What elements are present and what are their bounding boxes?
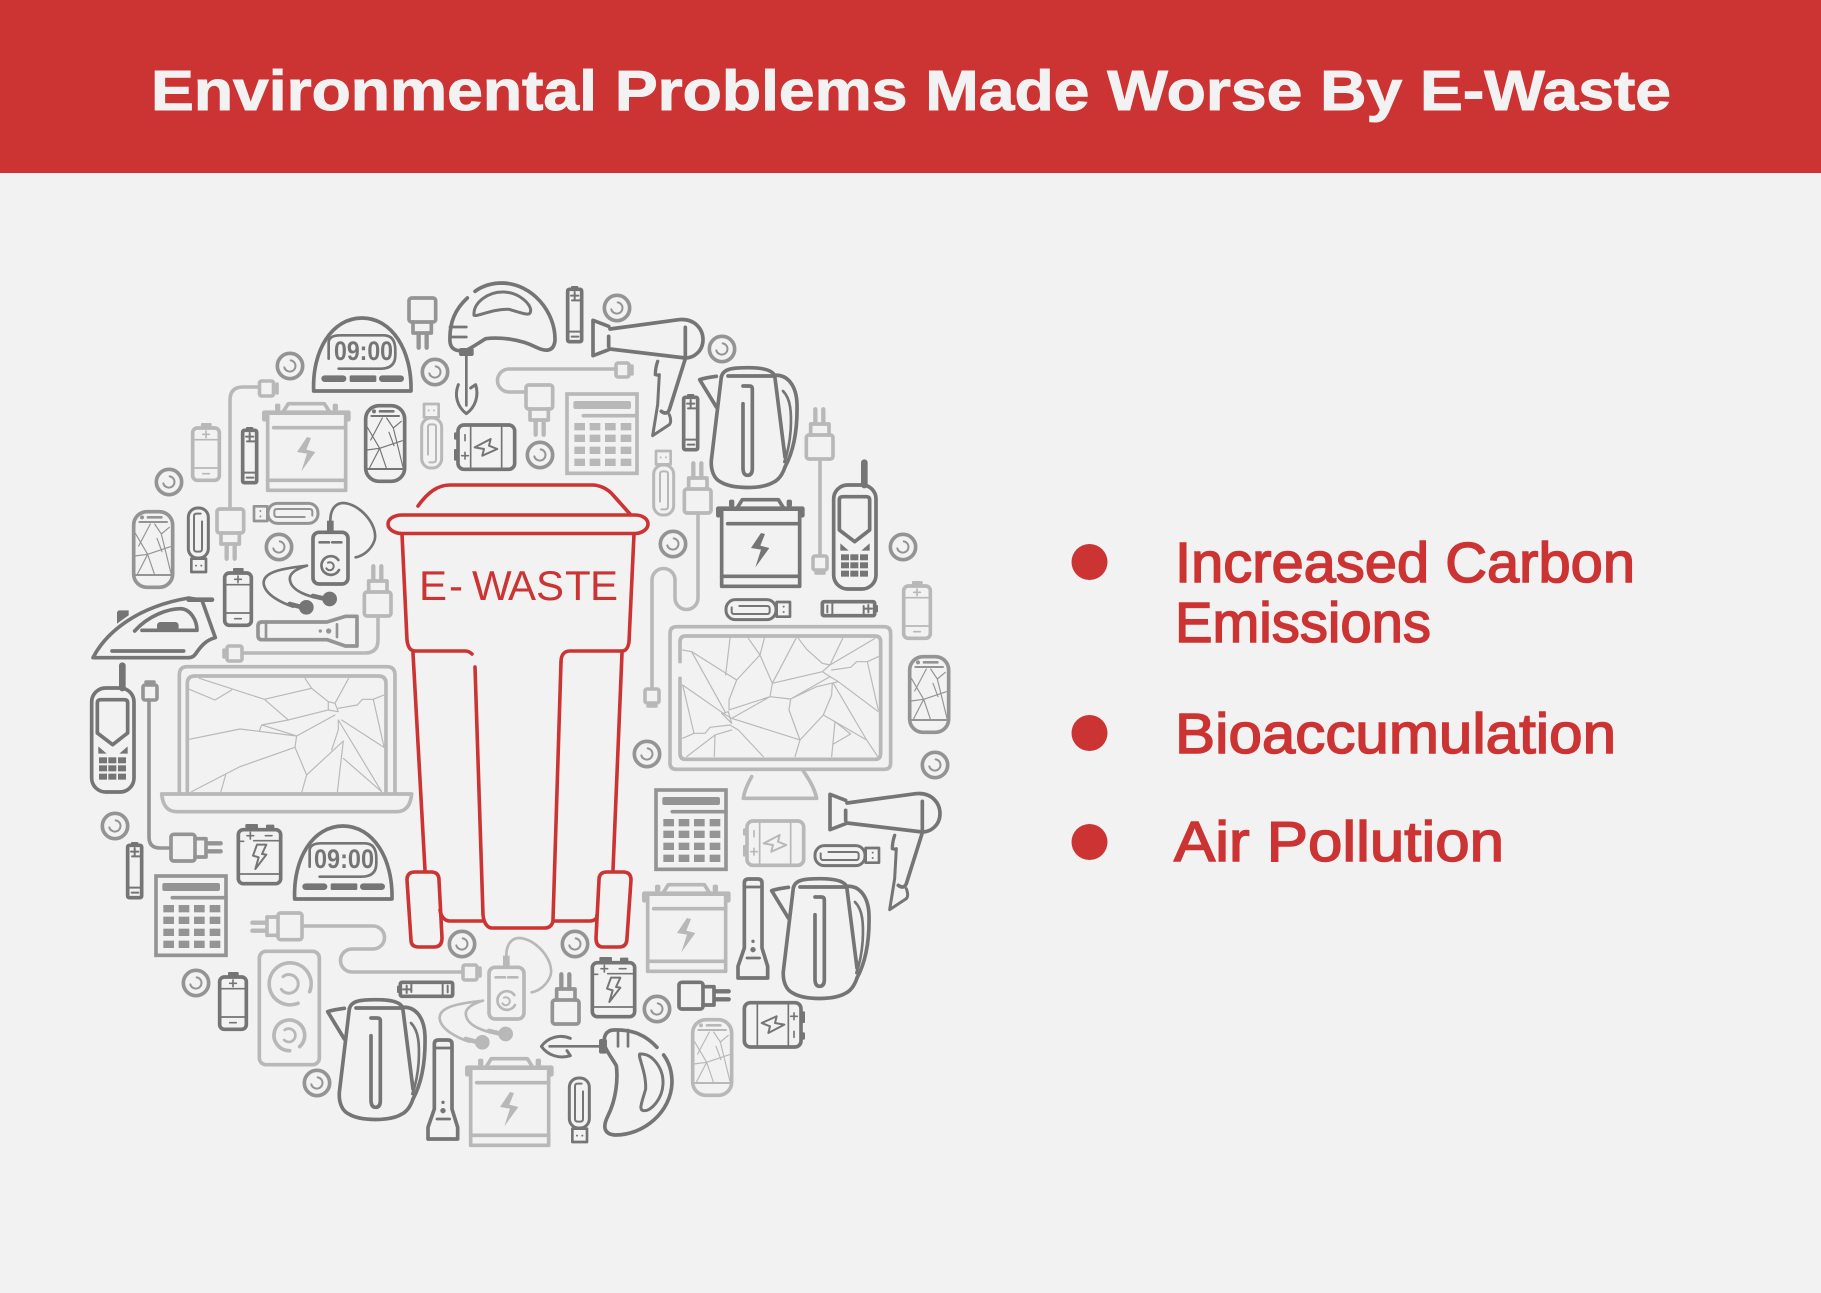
icon: clock: 09:00 [314,844,374,874]
icon: usb stick [654,451,674,515]
icon: usb stick [815,846,879,866]
icon: charger [252,913,302,940]
icon: disc [449,931,475,957]
icon: disc [922,752,948,778]
icon: usb stick [188,508,208,572]
icon: narrow battery horizontal [822,602,878,616]
icon: charger [552,974,579,1024]
icon: power cell [744,1003,805,1047]
icon: cracked monitor [670,627,891,798]
icon: disc [660,531,686,557]
icon: kettle [700,368,797,487]
bullet 1 text line 1: Increased Carbon [1175,531,1635,595]
icon: disc [709,336,735,362]
icon: hand mixer rotated [541,1030,672,1135]
cable: bottom charger [303,926,480,980]
bullet 3 dot [1072,824,1108,860]
bullet 1 text line 2: Emissions [1175,591,1431,655]
icon: narrow battery [568,286,582,342]
cable: charger to connector, mid left [224,617,378,661]
icon: wide battery [225,568,251,625]
icon: car battery [644,885,728,971]
icon: car battery [467,1059,551,1145]
icon: charger [684,463,711,513]
icon: cracked phone [134,512,173,587]
icon: iron [93,598,215,658]
bullet 2 dot [1072,715,1108,751]
icon: wide battery [904,581,930,638]
icon: charger [171,834,221,861]
icon: flashlight [738,879,768,978]
icon: narrow battery [243,427,257,483]
icon: disc [527,442,553,468]
cable: charger to connector, right [813,460,827,573]
icon: hair dryer [593,320,703,436]
icon: cordless phone [834,463,876,589]
icon: speaker [259,951,319,1065]
icon: calculator [567,394,637,473]
icon: calculator [156,876,226,955]
cable: charger with loop, top [498,363,632,392]
icon: charger [409,298,436,348]
bin rim [388,515,648,534]
icon: usb stick [254,503,318,523]
bin right wheel [596,872,631,947]
cable: charger to connector, upper left [230,381,277,508]
icon: flashlight [428,1040,458,1139]
icon: cracked laptop [162,667,412,812]
icon: disc [890,534,916,560]
icon: narrow battery [684,394,698,450]
icon: disc [634,741,660,767]
icon: kettle [772,879,869,998]
icon: clock: 09:00 [334,336,393,366]
icon: square battery [592,957,635,1017]
icon: calculator [656,790,726,869]
icon: usb stick [569,1078,589,1142]
icon: disc [102,813,128,839]
icon: kettle [328,1000,425,1119]
bullet list [1072,531,1635,874]
icon: disc [304,1070,330,1096]
icon: car battery [264,404,348,490]
bullet 1 dot [1072,544,1108,580]
icon: clock [295,826,392,899]
icon: charger [679,982,729,1009]
icon: cracked phone [910,657,949,732]
bin left wheel [407,872,442,947]
icon: car battery [718,500,802,586]
icon: power cell [454,425,515,469]
icon: square battery [238,824,281,884]
cable: S-shaped, right of bin [645,513,698,706]
icon: disc [266,534,292,560]
icon: charger [806,409,833,459]
icon: disc [183,970,209,996]
icon: music player with earphones [264,503,375,615]
bin legs and base [413,653,622,928]
cable: left charger [143,682,170,848]
icon: hair dryer [830,794,940,910]
icon: disc [422,359,448,385]
icon: power cell [743,821,804,865]
icon: cracked phone [693,1020,732,1095]
illustration: e-waste circle of devices [92,283,949,1145]
title: Environmental Problems Made Worse By E-Waste [151,59,1671,123]
icon: narrow battery horizontal [397,982,453,996]
icon: narrow battery [128,842,142,898]
icon: clock [314,318,411,391]
bin label: E-WASTE [419,562,618,609]
icon: usb stick [726,600,790,620]
icon: wide battery [193,423,219,480]
bullet 2 text: Bioaccumulation [1175,702,1616,766]
icon: flashlight horizontal [258,616,357,646]
bullet 3 text: Air Pollution [1174,810,1504,874]
icon: cracked phone [366,406,405,481]
icon: wide battery [220,972,246,1029]
bin lid [418,485,630,514]
icon: charger [364,566,391,616]
icon: usb stick [422,404,442,468]
icon: disc [156,469,182,495]
bin upper body [402,534,634,662]
icon: disc [604,295,630,321]
icon: charger [217,509,244,559]
icon: charger [526,385,553,435]
icon: hand mixer [450,283,555,414]
icon: disc [562,931,588,957]
icon: cordless phone [92,666,134,792]
header band [0,0,1821,173]
wheelie bin: e-waste [388,485,648,947]
icon: music player with earphones [440,938,551,1050]
icon: disc [644,996,670,1022]
icon: disc [277,353,303,379]
